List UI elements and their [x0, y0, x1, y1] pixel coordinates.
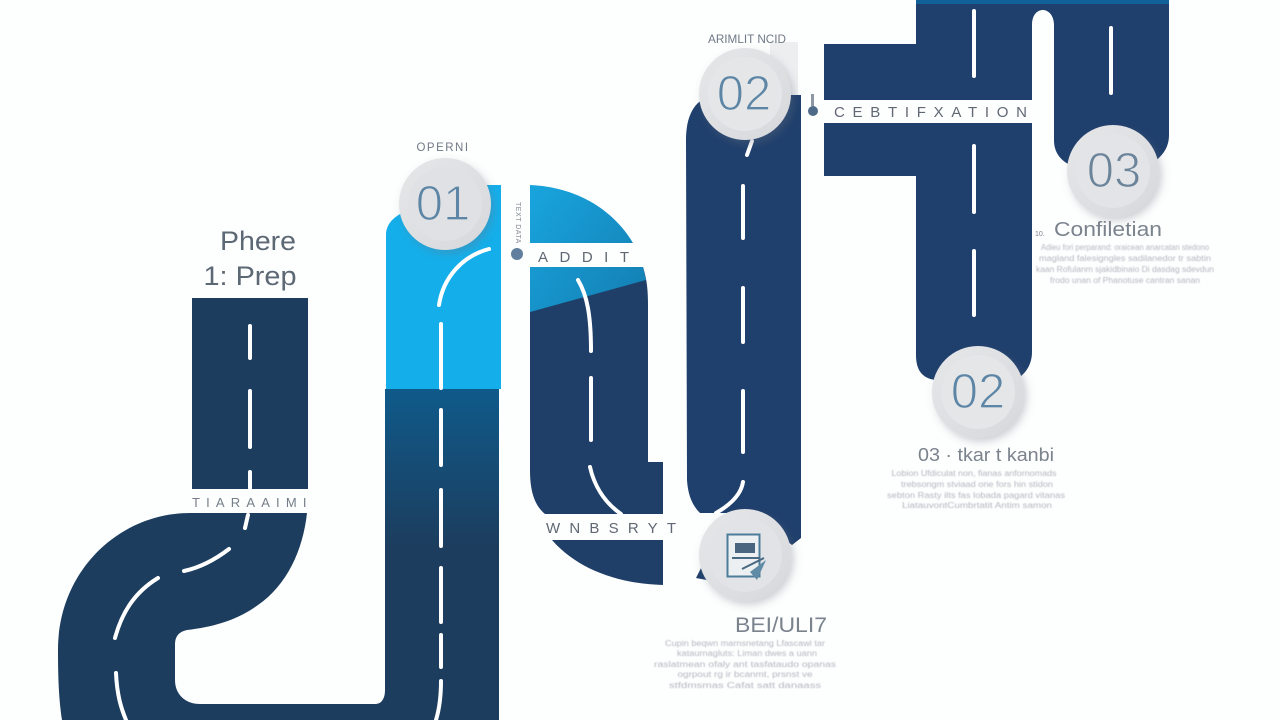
road: phase 1 cyan top section: [386, 185, 501, 720]
heading: Phase 1 Prep: 1: Prep: [204, 261, 296, 291]
text block: confirmation: [1035, 219, 1214, 285]
text block: confirmation: Adieu fori perparand: oraicean anarcatan stedono: [1041, 243, 1210, 252]
badge: 02: [699, 48, 791, 140]
text block: lower 02: 03 · tkar t kanbi: [918, 445, 1054, 465]
road: phase 1 straight segment: [192, 298, 308, 489]
text block: confirmation: frodo unan of Phanotuse cantran sanan: [1050, 276, 1200, 285]
text block: lower 02: trebsongm stviaad one fors hin stidon: [901, 480, 1053, 489]
text block: lower 02: Lobion Ufdiculat non, fianas anfornomads: [892, 469, 1056, 478]
text block: bottom step: ogrpout rg ir bcanmt, prsnst ve: [678, 670, 813, 679]
badge: 03: 03: [1087, 144, 1141, 198]
text block: confirmation: magland falesigngles sadilanedor tr sabtin: [1039, 254, 1211, 263]
text block: lower 02: [887, 445, 1065, 510]
badge: 02 lower: 02: [951, 365, 1005, 419]
road: phase 1 curve into vertical road: [58, 389, 499, 720]
badge: 01: [399, 158, 491, 250]
text block: lower 02: sebton Rasty ilts fas lobada pagard vitanas: [887, 491, 1065, 500]
road: certification crossroad: [824, 0, 1169, 380]
badge: 03: [1067, 125, 1159, 217]
label: audit band: [511, 243, 640, 267]
heading: Phase 1 Prep: Phere: [220, 226, 296, 256]
text block: confirmation: 10.: [1035, 231, 1045, 238]
label: certification band: [808, 94, 1032, 123]
badge: 01: 01: [416, 177, 470, 231]
label: small vertical note: TEXT DATA: [514, 202, 521, 244]
text block: bottom step: Cupin beqwn marnsnetang Lfascawi tar: [665, 639, 825, 648]
badge: 02: 02: [717, 67, 771, 121]
caption: step 02: ARIMLIT NCID: [708, 32, 786, 46]
text block: bottom step: kataurnagluts: Liman dwes a uann: [677, 649, 817, 658]
label: training band: TIARAAIMI: [192, 495, 310, 510]
badge: 02 lower: [932, 346, 1024, 438]
badge: document icon: [699, 509, 791, 601]
text block: lower 02: LiatauvontCumbrtatit Antim samon: [902, 501, 1052, 510]
label: audit band: ADDIT: [538, 249, 634, 266]
text block: bottom step: [654, 614, 836, 690]
text block: confirmation: kaan Rofulanm sjakidbinaio Di dasdag sdevdun: [1036, 265, 1214, 274]
text block: bottom step: BEI/ULI7: [735, 614, 827, 637]
road: audit section: [530, 185, 663, 585]
text block: confirmation: Confiletian: [1054, 219, 1162, 241]
text block: bottom step: raslatmean ofaly ant tasfataudo opanas: [654, 660, 836, 669]
label: wnbsryt band: WNBSRYT: [546, 520, 681, 537]
heading: Phase 1 Prep: [204, 226, 296, 291]
road: phase 2 vertical: [686, 42, 801, 581]
text block: bottom step: stfdmsmas Cafat satt danaass: [669, 681, 821, 690]
caption: step 01: OPERNI: [416, 142, 470, 154]
label: certification band: CEBTIFXATION: [834, 104, 1032, 121]
